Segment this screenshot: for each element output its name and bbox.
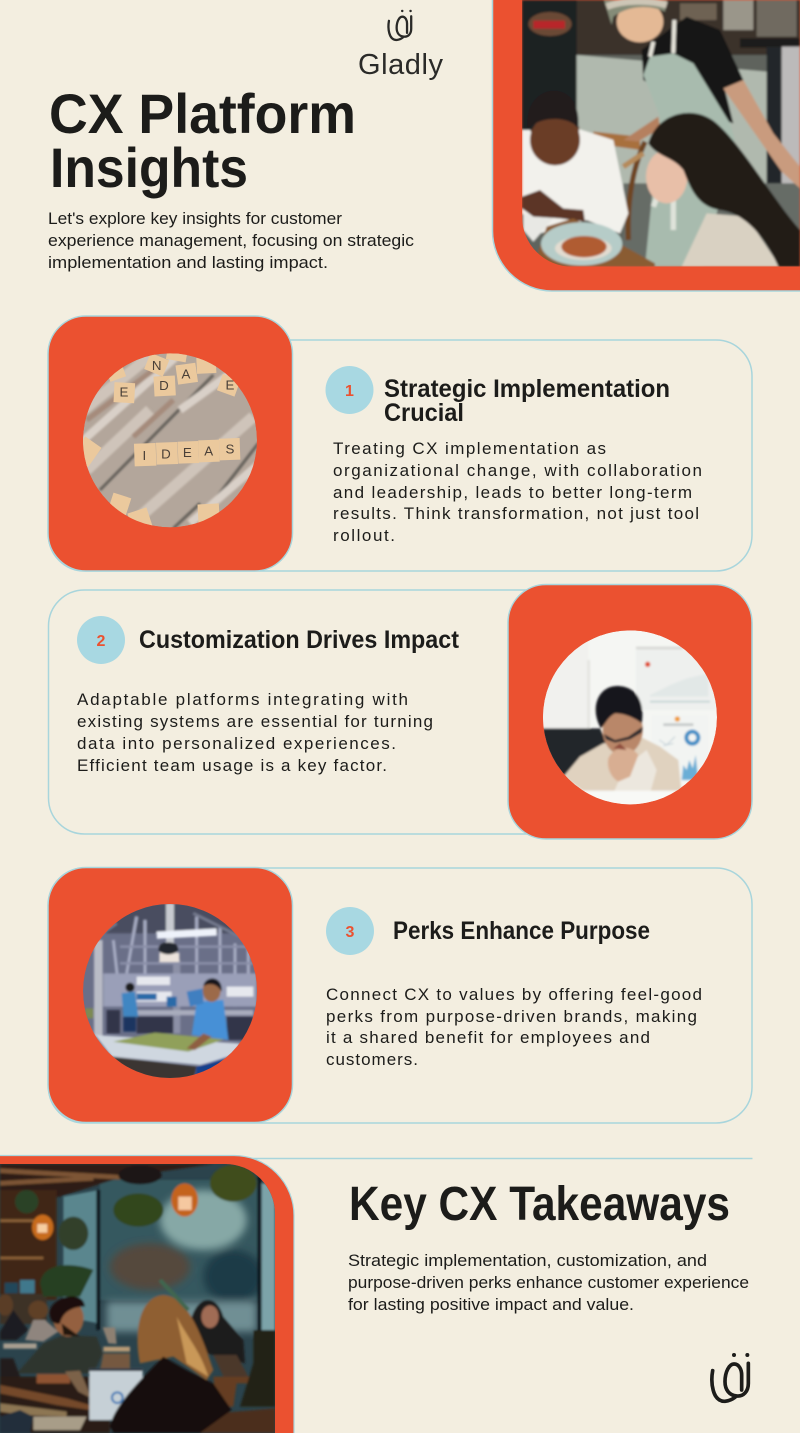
- photo: scrabble tiles spelling ideas: A: [182, 366, 191, 381]
- orange image tile: [48, 868, 292, 1122]
- heading 2: Customization Drives Impact: [139, 626, 460, 654]
- body 3: customers.: [326, 1050, 418, 1069]
- panel: insight 1: [48, 316, 752, 571]
- photo: scrabble tiles spelling ideas: D: [159, 378, 169, 393]
- heading: key takeaways: Key CX Takeaways: [349, 1178, 730, 1231]
- photo: factory worker at table: [80, 903, 260, 1080]
- panel: insight 3: [48, 868, 752, 1123]
- title: [49, 82, 356, 199]
- body 2: data into personalized experiences.: [77, 734, 396, 753]
- divider line: [240, 1158, 752, 1160]
- intro text: Let's explore key insights for customer: [48, 209, 342, 228]
- body 3: perks from purpose-driven brands, making: [326, 1007, 697, 1026]
- photo: scrabble tiles spelling ideas: A: [204, 444, 213, 459]
- body 3: [326, 985, 702, 1069]
- photo: scrabble tiles spelling ideas: E: [226, 377, 235, 392]
- takeaways text: [348, 1251, 749, 1314]
- body 1: results. Think transformation, not just tool: [333, 504, 699, 523]
- card outline: [48, 868, 752, 1123]
- takeaways text: Strategic implementation, customization, and: [348, 1251, 707, 1270]
- heading 3: Perks Enhance Purpose: [393, 917, 650, 945]
- orange image tile: [508, 584, 752, 839]
- photo: scrabble tiles spelling ideas: E: [183, 445, 192, 460]
- panel: takeaways: [0, 1156, 753, 1433]
- photo: scrabble tiles spelling ideas: E: [120, 385, 129, 400]
- photo: woman with glasses and charts: [543, 630, 717, 804]
- intro text: experience management, focusing on strategic: [48, 231, 415, 250]
- icon: Gladly mark, footer: [712, 1353, 749, 1401]
- body 2: [77, 690, 433, 775]
- intro text: [48, 209, 415, 272]
- body 2: Adaptable platforms integrating with: [77, 690, 408, 709]
- heading 1: Crucial: [384, 399, 464, 427]
- body 2: Efficient team usage is a key factor.: [77, 756, 387, 775]
- circle 2: [77, 616, 125, 664]
- icon: Gladly mark: [388, 10, 412, 40]
- panel: hero photo frame: [492, 0, 800, 291]
- photo: people working in a cafe: [0, 1164, 275, 1433]
- logo: Gladly: [358, 10, 444, 81]
- body 1: [333, 439, 702, 545]
- photo: scrabble tiles spelling ideas: [83, 353, 257, 528]
- takeaways text: purpose-driven perks enhance customer experience: [348, 1273, 749, 1292]
- panel: insight 2: [48, 584, 752, 839]
- takeaways text: for lasting positive impact and value.: [348, 1295, 634, 1314]
- photo: scrabble tiles spelling ideas: D: [161, 446, 171, 461]
- card outline: [48, 340, 752, 571]
- body 1: rollout.: [333, 526, 395, 545]
- logo: Gladly: Gladly: [358, 49, 444, 81]
- body 1: and leadership, leads to better long-term: [333, 483, 692, 502]
- heading 1: [384, 375, 670, 427]
- card outline: [48, 590, 752, 834]
- photo: scrabble tiles spelling ideas: N: [152, 358, 161, 373]
- photo: scrabble tiles spelling ideas: I: [142, 448, 146, 463]
- number 2: 2: [97, 633, 106, 650]
- body 2: existing systems are essential for turning: [77, 712, 433, 731]
- number 3: 3: [346, 924, 355, 941]
- number 1: 1: [345, 383, 354, 400]
- circle 3: [326, 907, 374, 955]
- photo: scrabble tiles spelling ideas: S: [226, 441, 235, 456]
- body 1: Treating CX implementation as: [333, 439, 606, 458]
- photo: server and diners at a cafe: [522, 0, 800, 267]
- intro text: implementation and lasting impact.: [48, 253, 328, 272]
- title: CX Platform: [49, 82, 356, 145]
- body 3: Connect CX to values by offering feel-good: [326, 985, 702, 1004]
- orange image tile: [48, 316, 292, 571]
- title: Insights: [50, 136, 248, 199]
- body 1: organizational change, with collaboration: [333, 461, 702, 480]
- orange photo frame: [0, 1156, 294, 1433]
- circle 1: [326, 366, 374, 414]
- heading 1: Strategic Implementation: [384, 375, 670, 403]
- body 3: it a shared benefit for employees and: [326, 1028, 650, 1047]
